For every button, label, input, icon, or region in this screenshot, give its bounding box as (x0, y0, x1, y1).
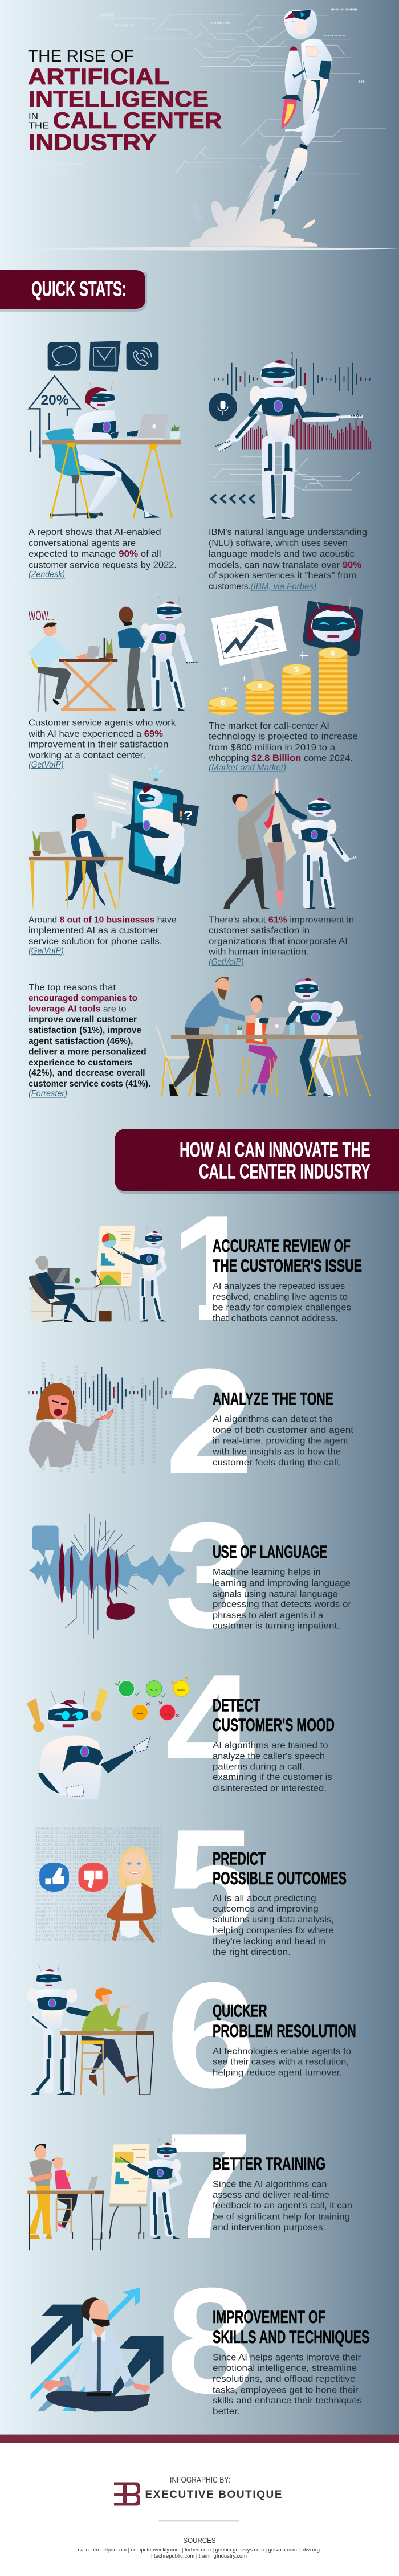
numeral 7: 7 (165, 2102, 253, 2270)
stat 5 text (28, 915, 177, 956)
binary background: 1011010101010101001010101011110101011010101010101 (35, 1867, 162, 1871)
body text (213, 2180, 352, 2232)
binary background: 0101000111010101010101010011010101010101010101010 (35, 1855, 162, 1859)
body text: be of significant help for training (213, 2212, 350, 2222)
illustration: robot with mood faces (27, 1676, 192, 1800)
stat 3 text: improvement in their satisfaction (28, 740, 169, 749)
binary background: 1001111010111101100000100001111010101101010101010 (35, 1859, 162, 1863)
waveform (214, 352, 370, 395)
illustration: agent at desk with colleague and robot (28, 596, 198, 712)
title line: Industry: INDUSTRY (28, 130, 157, 156)
laptop (138, 414, 169, 439)
robot (294, 973, 319, 1000)
sources list (78, 2547, 320, 2559)
seated man (28, 622, 87, 712)
stat 1 text: conversational agents are (28, 538, 136, 548)
stat 1 text: customer service requests by 2022. (28, 560, 177, 570)
binary background: 0100111101010101010110101011101010101011101010101 (35, 1910, 162, 1915)
illustration: standing robot with sound waves (209, 352, 370, 519)
heading (213, 2306, 369, 2347)
stat 2 text: models, can now translate over 90% (209, 560, 361, 570)
illustration: robot beside man at laptop (27, 1964, 154, 2095)
body text: customer is turning impatient. (213, 1622, 340, 1631)
flying robot (270, 10, 332, 217)
body text: resolved, enabling live agents to (213, 1292, 348, 1302)
binary background: 1101010101011010100101011110101010101010101010011 (35, 1875, 162, 1879)
binary background: 1010010101001111010101110110000000011110101010010 (35, 1835, 162, 1839)
section 5: predict possible outcomes (35, 1798, 347, 1966)
body text (213, 2353, 362, 2416)
body text (212, 1415, 354, 1468)
banner heading (180, 1138, 370, 1183)
microphone badge (209, 393, 237, 421)
stat 7 text: The top reasons that (28, 983, 116, 993)
phone (128, 781, 183, 884)
stat 6 text: (GetVoIP) (209, 957, 244, 967)
stat 2 text: language models and two acoustic (209, 549, 355, 559)
panel: stat 5, businesses (28, 766, 199, 956)
panel: stat 6, high five (208, 778, 357, 967)
stat 6 text: organizations that incorporate AI (209, 937, 348, 946)
table (27, 2176, 104, 2250)
stat 3 text: (GetVoIP) (28, 760, 64, 770)
robot (36, 1964, 62, 1989)
stat 3 text (28, 718, 176, 770)
body text: AI analyzes the repeated issues (213, 1281, 345, 1291)
binary background: 0101010111101010000110010110101010101010101010110 (35, 1895, 162, 1899)
numeral 8: 8 (166, 2256, 255, 2424)
stat 7 text (28, 983, 150, 1099)
body text: customer feels during the call. (213, 1458, 341, 1468)
thumbs up badge (39, 1863, 69, 1892)
stat 1 text: (Zendesk) (28, 570, 65, 579)
stat 7 text: encouraged companies to (28, 993, 137, 1003)
stat 7 text: (Forrester) (28, 1089, 67, 1099)
body text: tone of both customer and agent (213, 1426, 354, 1435)
stat 2 text: IBM's natural language understanding (209, 528, 367, 537)
binary background: 1110101101010100101010011010101010101010101010101 (35, 1930, 162, 1935)
table items (171, 1015, 363, 1096)
table (60, 2031, 154, 2035)
numeral 1: 1 (170, 1184, 256, 1352)
stat 2 text: of spoken sentences it "hears" from (209, 571, 356, 581)
binary background: 1010100101001110101010111101010100000111010101010 (35, 1839, 162, 1843)
exclamation word: WOW... (28, 609, 54, 624)
stat 1 text (28, 528, 177, 579)
robot with headset tile (303, 598, 363, 656)
figure label: 20 percent: 20% (41, 393, 68, 408)
coin stacks: $ (331, 650, 336, 657)
stat 4 text: whopping $2.8 Billion come 2024. (208, 753, 353, 763)
stat 7 text: customer service costs (41%). (28, 1079, 150, 1089)
desk with crossed legs (59, 637, 117, 711)
footer: credit and sources (78, 2475, 320, 2559)
binary background: 0011010101101001110101010101000010101010101010101 (35, 1891, 162, 1895)
question tile (173, 803, 199, 826)
stat 7 text: leverage AI tools are to (28, 1005, 126, 1014)
body text: better. (213, 2407, 240, 2416)
circuit lines (13, 9, 386, 174)
section 1: accurate review (28, 1184, 362, 1352)
coin stacks: $ (294, 666, 299, 673)
robot (260, 353, 296, 386)
body text: disinterested or interested. (213, 1784, 327, 1794)
binary background: 1000101010110101011111010101010100010101010100101 (35, 1863, 162, 1867)
body text (213, 1893, 334, 1957)
spectrum bars (242, 411, 370, 450)
banner heading: QUICK STATS: (31, 277, 127, 301)
body text: processing that detects words or (213, 1600, 351, 1610)
binary background: 1111010101010010101011010101011010111010101010010 (35, 1934, 162, 1939)
binary background: 1101010101000000101101001010101011101010101010010 (35, 1918, 162, 1923)
logo mark (114, 2482, 140, 2506)
speech bubble blue (32, 1525, 59, 1558)
robot (156, 596, 182, 620)
stat 1 text: A report shows that AI-enabled (28, 528, 161, 537)
stat 6 text: There's about 61% improvement in (209, 915, 354, 925)
stat 7 text: agent satisfaction (46%), (28, 1036, 133, 1046)
sources list: | techrepublic.com | trainingIndustry.com (151, 2553, 247, 2559)
sources list: callcentrehelper.com | computerweekly.com | forbes.com | genbin.genesys.com | getvoip.com | tdwi.org (78, 2547, 320, 2553)
body text: signals using natural language (213, 1590, 338, 1599)
robot (113, 785, 185, 876)
illustration: people and robot high five (223, 778, 357, 909)
stat 7 text: deliver a more personalized (28, 1047, 146, 1057)
illustration: meeting table with robot (157, 973, 370, 1096)
woman (107, 1847, 157, 1914)
heading: CUSTOMER'S MOOD (213, 1714, 335, 1735)
heading (213, 1695, 335, 1735)
panel: stat 4, market growth (208, 598, 363, 773)
heading (213, 1235, 362, 1276)
body text: skills and enhance their techniques (213, 2396, 362, 2406)
section 6: quicker problem resolution (27, 1951, 356, 2119)
heading: QUICKER (213, 2001, 267, 2021)
body text (213, 1741, 332, 1794)
speech bubbles and bulb (93, 766, 163, 815)
standing man (118, 607, 146, 711)
body text: that chatbots cannot address. (213, 1314, 338, 1324)
binary background: 1010101101010100011101010101010101010101010101001 (35, 1899, 162, 1903)
arrow with percentage (29, 376, 80, 456)
stat 5 text: implemented AI as a customer (28, 926, 159, 936)
stat 3 text: with AI have experienced a 69% (28, 729, 163, 739)
binary background: 0101010111101010100101010101011010101010101010110 (35, 1879, 162, 1883)
speech bubble maroon (107, 1596, 135, 1620)
stat 5 text: (GetVoIP) (28, 946, 64, 956)
maroon spikes (59, 1541, 119, 1606)
section 3: use of language (28, 1491, 351, 1659)
feet and stands below (29, 2232, 181, 2239)
illustration: thumbs and woman (39, 1847, 157, 1914)
icon: envelope check tile (89, 341, 121, 372)
mood faces (115, 1676, 192, 1720)
heading (213, 1848, 347, 1888)
stat 2 text: (NLU) software, which uses seven (209, 538, 348, 548)
body text: assess and deliver real-time (213, 2190, 329, 2200)
body text: AI algorithms are trained to (213, 1741, 328, 1750)
body text: resolutions, and offload repetitive (213, 2374, 356, 2384)
coin stacks: $ (258, 683, 262, 690)
illustration: robot at laptop with channel icons (29, 341, 181, 519)
body text: they're lacking and head in (213, 1937, 325, 1946)
body text: phrases to alert agents if a (213, 1611, 323, 1620)
heading: ANALYZE THE TONE (213, 1389, 333, 1409)
desk and woman (28, 814, 123, 910)
stat 6 text (208, 915, 354, 967)
illustration: angry woman with voice wave (28, 1362, 170, 1473)
title line: The Rise Of: THE RISE OF (28, 47, 134, 66)
binary background: 1101111010101001010101011110101010101010101010101 (35, 1926, 162, 1931)
title line: Artificial: ARTIFICIAL (28, 64, 169, 89)
body text: Machine learning helps in (213, 1567, 321, 1577)
stat 4 text: (Market and Market) (209, 763, 286, 773)
body text: AI algorithms can detect the (213, 1415, 333, 1424)
logo wordmark: EXECUTIVE BOUTIQUE (145, 2489, 282, 2501)
chairs (157, 1026, 197, 1096)
binary background (35, 1827, 162, 1943)
illustration: presenter robot and seated man (28, 1226, 166, 1322)
exclamation marks (27, 1688, 108, 1732)
stat 7 text: (42%), and decrease overall (28, 1068, 145, 1078)
binary background: 1000011100101011011010101000111010101010101010100 (35, 1922, 162, 1927)
banner: quick stats (0, 270, 147, 312)
data rain (43, 1362, 154, 1473)
heading: DETECT (213, 1695, 260, 1716)
illustration: woman at desk and robot from phone (28, 766, 199, 910)
body text (213, 2047, 351, 2077)
arrows (31, 2288, 164, 2411)
body text: helping companies fix where (213, 1926, 334, 1936)
flip chart (95, 1226, 135, 1321)
binary background: 0100101011110101010101010100101010101101010111011 (35, 1851, 162, 1855)
stat 4 text: from $800 million in 2019 to a (209, 743, 335, 753)
heading: BETTER TRAINING (213, 2153, 325, 2174)
body text: AI is all about predicting (213, 1893, 316, 1903)
circuit lines (209, 457, 370, 490)
body text: Since AI helps agents improve their (213, 2353, 361, 2362)
heading: USE OF LANGUAGE (213, 1541, 327, 1562)
seated woman (239, 995, 278, 1096)
body text: the right direction. (213, 1948, 291, 1957)
body text: emotional intelligence, streamline (213, 2363, 357, 2373)
desk (42, 440, 181, 444)
smoke cloud and ground (0, 134, 399, 251)
woman (263, 793, 296, 909)
body text: examining if the customer is (213, 1773, 332, 1782)
binary background: 1010110110101000111101010101101010101011011110101 (35, 1831, 162, 1835)
body text: Since the AI algorithms can (213, 2180, 327, 2190)
stat 4 text: technology is projected to increase (209, 732, 358, 742)
man at desk (28, 1256, 112, 1322)
robot (307, 793, 331, 817)
panel: stat 1, conversational agents (28, 341, 181, 579)
woman lower half (107, 1913, 155, 1943)
banner: how AI can innovate (115, 1129, 399, 1194)
icon: speech bubble tile (48, 342, 80, 371)
illustration: chart, robot tile and coin stacks (209, 598, 363, 715)
numeral 3: 3 (165, 1491, 253, 1659)
stat 6 text: with human interaction. (208, 948, 309, 957)
stat 1 text: expected to manage 90% of all (28, 549, 161, 559)
man and woman (28, 2144, 78, 2234)
body text: tasks, employees get to hone their (213, 2385, 358, 2395)
illustration: woman at desk and robot from phone: !? (178, 809, 193, 823)
sources heading: SOURCES (183, 2536, 216, 2545)
icon: phone tile (127, 342, 158, 370)
body text (213, 1567, 351, 1631)
flip chart (109, 2144, 149, 2234)
coin stacks: $ (221, 699, 226, 706)
stat 3 text: Customer service agents who work (28, 718, 176, 728)
numeral 4: 4 (165, 1643, 256, 1811)
section 4: detect customer's mood (27, 1643, 335, 1811)
binary background: 0101101010100111101010101010101011010101010101101 (35, 1871, 162, 1875)
coin stacks (209, 648, 347, 715)
illustration: meditating man with arrows (31, 2288, 164, 2411)
binary background: 1010101010101010101101010100001110101010101111101 (35, 1938, 162, 1943)
body text: learning and improving language (213, 1579, 351, 1589)
woman (28, 1383, 113, 1468)
stat 6 text: customer satisfaction in (209, 926, 310, 936)
body text: with live insights as to how the (212, 1447, 341, 1456)
man (81, 1988, 149, 2095)
stat 4 text: The market for call-center AI (209, 721, 329, 731)
section 2: analyze the tone (28, 1337, 354, 1505)
panel: stat 7, top reasons (28, 973, 370, 1099)
heading: IMPROVEMENT OF (213, 2306, 325, 2327)
credit label: INFOGRAPHIC BY: (170, 2475, 230, 2485)
title line: Call Center: CALL CENTER (53, 108, 222, 133)
title line: In the: IN (28, 112, 38, 121)
bearded man (169, 977, 246, 1096)
stat 2 text: customers.(IBM, via Forbes) (209, 582, 316, 591)
body text: and intervention purposes. (213, 2223, 325, 2232)
binary background: 0000010111010010101111010101010101010101000011100 (35, 1827, 162, 1831)
binary background: 1010110101010000110101010111111010101101010000110 (35, 1847, 162, 1851)
body text: solutions using data analysis, (213, 1915, 334, 1925)
title line: Intelligence: INTELLIGENCE (28, 87, 209, 112)
trend chart (211, 606, 287, 684)
body text: be ready for complex challenges (213, 1303, 351, 1313)
stat 7 text: improve overall customer (28, 1015, 137, 1024)
header: hero (0, 9, 399, 251)
numeral 6: 6 (166, 1951, 256, 2119)
body text: see their cases with a resolution, (213, 2057, 349, 2067)
numeral 5: 5 (166, 1798, 255, 1966)
man (43, 2297, 150, 2411)
body text: feedback to an agent's call, it can (213, 2201, 352, 2211)
binary background: 1010101110101010101011010101010101010101110101011 (35, 1907, 162, 1911)
divider (159, 2520, 239, 2521)
stat 7 text: experience to customers (28, 1058, 133, 1068)
panel: stat 2, natural language understanding (209, 352, 370, 591)
title line: In the (28, 112, 49, 131)
body text: patterns during a call, (213, 1762, 304, 1772)
chevrons (211, 495, 255, 503)
thumbs down badge (78, 1863, 108, 1892)
robot (145, 1227, 163, 1246)
title line: In the: THE (28, 121, 49, 131)
voice wave (28, 1367, 170, 1411)
body text: in real-time, providing the agent (213, 1436, 349, 1446)
binary background: 0010101011101010100001101011010011110101010101010 (35, 1843, 162, 1847)
circuit lines (56, 1514, 142, 1639)
robot (156, 2138, 177, 2159)
robot (47, 1691, 89, 1731)
body text: AI technologies enable agents to (213, 2047, 351, 2056)
heading (213, 2001, 356, 2041)
panel: stat 3, agent satisfaction (28, 596, 198, 770)
stat 2 text (209, 528, 367, 591)
binary background: 1110101010010101101010101010011110101010101010110 (35, 1883, 162, 1887)
blue wave (28, 1541, 185, 1600)
binary background: 1011010101010110101101010100000011101010101010110 (35, 1887, 162, 1891)
plant (169, 431, 180, 439)
section 7: better training (27, 2102, 352, 2270)
heading: PREDICT (213, 1848, 266, 1869)
title (28, 47, 222, 156)
body text: outcomes and improving (213, 1904, 319, 1914)
body text: helping reduce agent turnover. (213, 2068, 342, 2077)
stat 5 text: Around 8 out of 10 businesses have (28, 915, 177, 925)
man (223, 778, 278, 909)
body text: analyze the caller's speech (213, 1752, 325, 1761)
binary background: 1000000011101010101010101010101010101010101010101 (35, 1903, 162, 1907)
stat 4 text (208, 721, 358, 773)
stat 5 text: service solution for phone calls. (28, 937, 162, 946)
illustration: speech bubbles and circuit wave (28, 1514, 185, 1639)
body text (213, 1281, 351, 1324)
binary background: 0100111101010101001011010100101010101010101110011 (35, 1914, 162, 1919)
section 8: improvement of skills (31, 2256, 369, 2424)
numeral 2: 2 (165, 1337, 254, 1505)
stat 3 text: working at a contact center. (28, 751, 145, 761)
footer band (0, 2435, 399, 2443)
stat 7 text: satisfaction (51%), improve (28, 1026, 141, 1035)
illustration: robot presenting to colleagues (27, 2138, 181, 2250)
